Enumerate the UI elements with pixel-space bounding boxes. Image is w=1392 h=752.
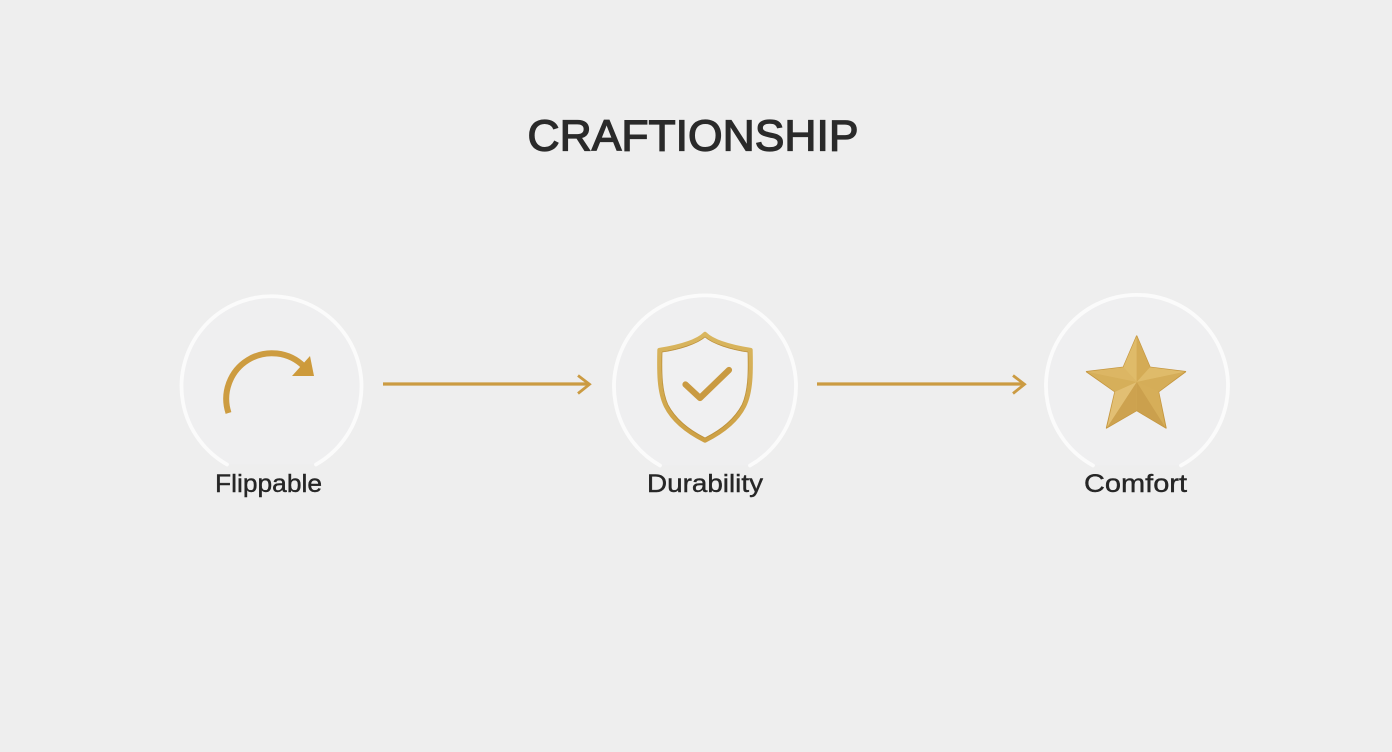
label: Durability: Durability	[647, 470, 764, 498]
label: Comfort: Comfort	[1084, 470, 1187, 498]
step: Comfort	[1046, 295, 1228, 498]
circle outline: Comfort	[1046, 295, 1228, 466]
arrow: Flippable to Durability	[383, 376, 590, 394]
icon: gold star	[1086, 336, 1186, 428]
step: Durability	[614, 295, 796, 498]
icon: shield with check mark	[659, 334, 751, 440]
title: CRAFTIONSHIP	[528, 112, 858, 160]
arrow: Durability to Comfort	[817, 376, 1024, 394]
circle outline: Durability	[614, 295, 796, 466]
icon: curved flip arrow	[226, 353, 314, 413]
circle outline: Flippable	[182, 296, 362, 464]
step: Flippable	[182, 296, 362, 498]
label: Flippable: Flippable	[215, 470, 322, 498]
